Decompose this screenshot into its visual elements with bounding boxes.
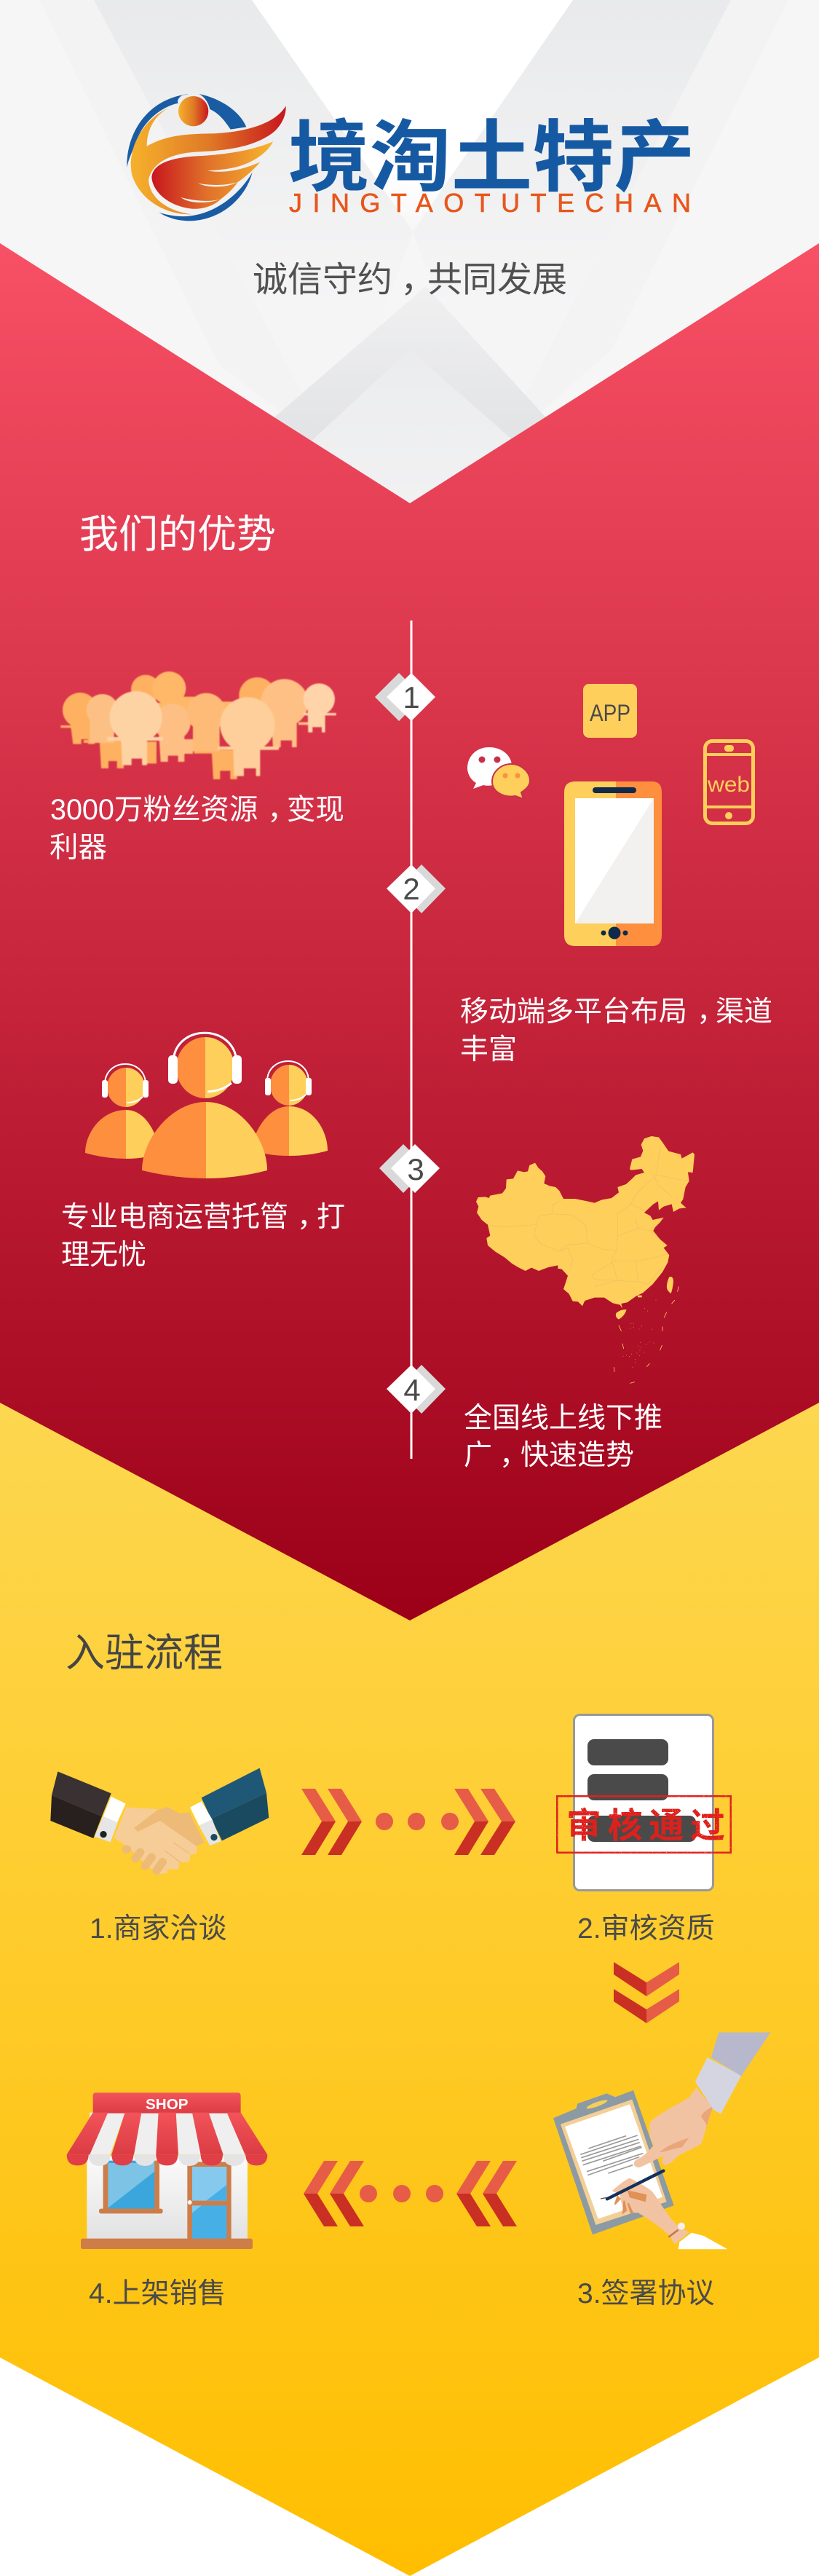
arrow: chevrons and dots right xyxy=(301,1789,515,1855)
timeline xyxy=(375,621,446,1459)
icon: shop: SHOP xyxy=(146,2096,189,2113)
label: step 3: 3.签署协议 xyxy=(577,2278,715,2309)
text: fans: 利器 xyxy=(50,832,107,864)
icon: crowd of fans xyxy=(60,671,336,779)
text: promotion: 全国线上线下推 xyxy=(464,1403,662,1434)
text: mobile platforms: 丰富 xyxy=(460,1034,517,1066)
step marker 4 xyxy=(387,1365,446,1414)
map of China xyxy=(476,1136,695,1383)
panel: white bottom chevron xyxy=(0,2358,819,2576)
text: fans xyxy=(50,794,344,864)
text: mobile platforms: 移动端多平台布局 ，渠道 xyxy=(460,996,772,1028)
text: mobile platforms xyxy=(460,996,772,1066)
left agent xyxy=(85,1064,160,1159)
stamp xyxy=(556,1795,732,1854)
icon: signing agreement xyxy=(553,2033,770,2249)
icon: chat bubbles xyxy=(467,747,530,799)
icon: web phone: web xyxy=(707,773,750,797)
heading: our advantages: 我们的优势 xyxy=(79,513,276,556)
center agent xyxy=(142,1033,267,1178)
icon: app tile: APP xyxy=(590,700,630,726)
text: fans: 3000万粉丝资源 ，变现 xyxy=(50,794,344,826)
stamp: 审核通过 xyxy=(566,1807,725,1846)
text: operations: 专业电商运营托管 ，打 xyxy=(61,1202,345,1233)
text: operations xyxy=(61,1202,345,1271)
icon: handshake xyxy=(50,1768,269,1874)
icon: web phone xyxy=(705,741,753,823)
step marker 1: 1 xyxy=(403,680,420,714)
label: step 1: 1.商家洽谈 xyxy=(90,1913,227,1945)
icon: smartphone xyxy=(564,781,662,946)
step marker 2: 2 xyxy=(403,872,420,906)
tagline: 诚信守约，共同发展 xyxy=(253,261,567,299)
panel: red advantages background xyxy=(0,243,819,1620)
panel: yellow process background xyxy=(0,1384,819,2576)
arrow: chevrons and dots left xyxy=(304,2161,517,2226)
text: promotion xyxy=(464,1403,662,1471)
arrow: chevrons down xyxy=(614,1962,679,2023)
step marker 3 xyxy=(379,1144,440,1193)
logo pinyin: JINGTAOTUTECHAN xyxy=(289,188,691,218)
label: step 4: 4.上架销售 xyxy=(89,2278,226,2309)
panel: header background xyxy=(0,0,819,510)
icon: shop xyxy=(67,2092,267,2249)
step marker 3: 3 xyxy=(407,1152,424,1186)
text: promotion: 广 ，快速造势 xyxy=(464,1440,634,1471)
logo wordmark: 境淘土特产 xyxy=(288,114,695,201)
heading: onboarding process: 入驻流程 xyxy=(66,1631,223,1675)
logo emblem xyxy=(127,94,286,221)
step marker 1 xyxy=(375,673,435,721)
step marker 2 xyxy=(387,864,446,913)
icon: app tile xyxy=(583,684,637,738)
text: operations: 理无忧 xyxy=(61,1240,146,1271)
step marker 4: 4 xyxy=(403,1373,421,1407)
icon: customer service team xyxy=(85,1033,328,1178)
right agent xyxy=(251,1061,328,1156)
label: step 2: 2.审核资质 xyxy=(577,1913,715,1945)
icon: document with approval stamp xyxy=(556,1714,732,1891)
